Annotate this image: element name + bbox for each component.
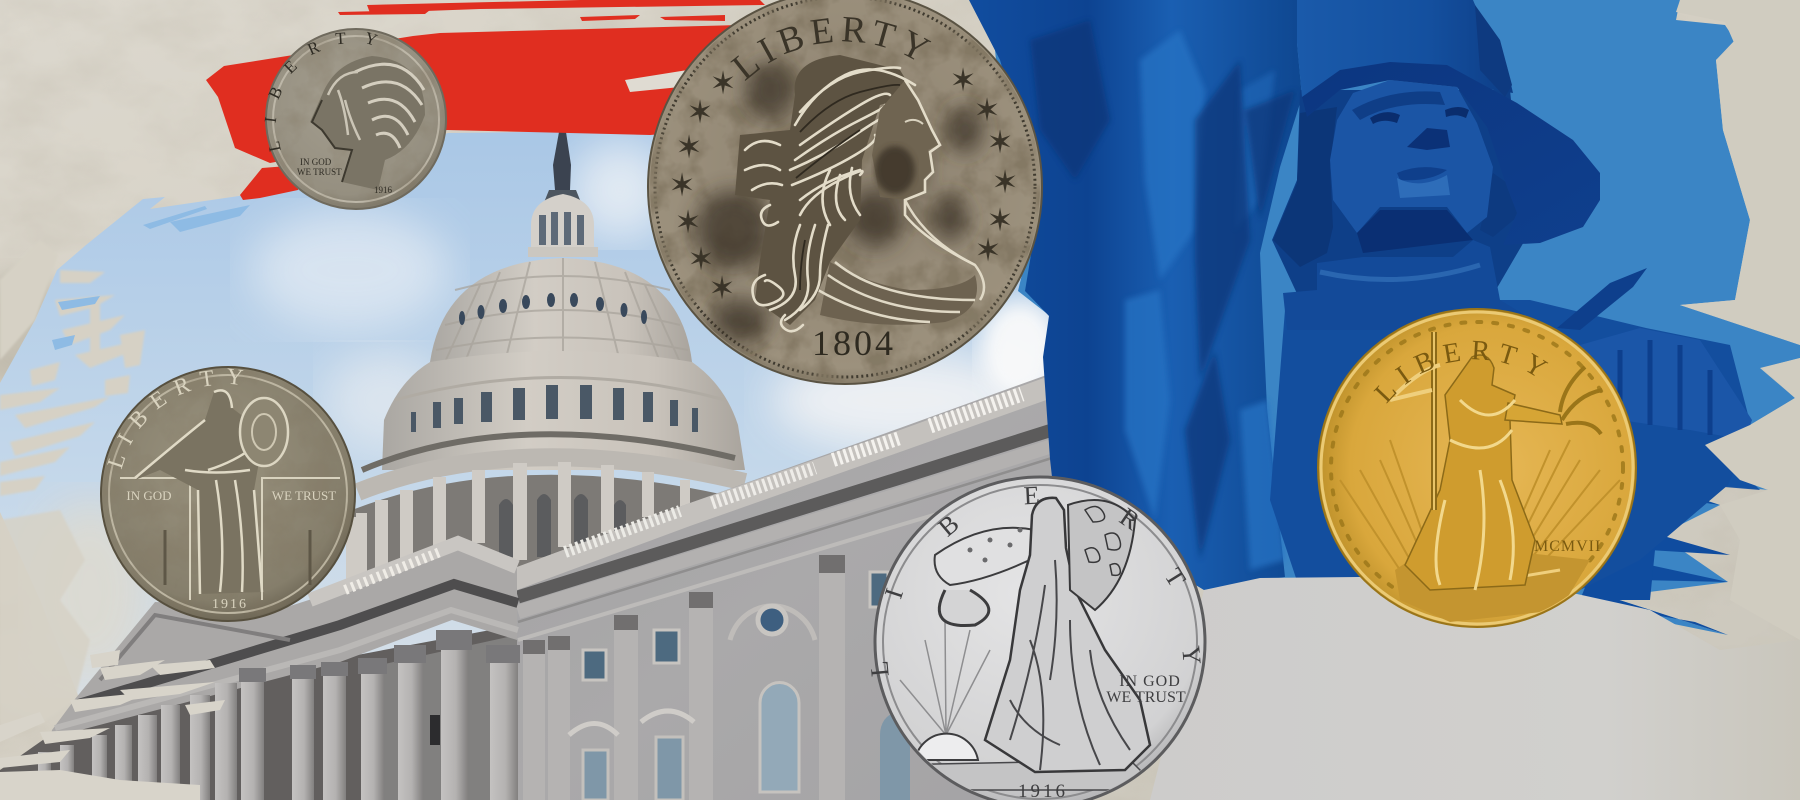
stars: ✶ bbox=[950, 62, 976, 98]
paper gap in red brush bbox=[625, 68, 700, 92]
stars: ✶ bbox=[688, 241, 714, 277]
lantern bbox=[528, 194, 598, 257]
coin: Mercury dime: LIBERTY bbox=[264, 32, 378, 152]
figure bbox=[1405, 355, 1535, 590]
coin letters: R bbox=[1114, 502, 1146, 536]
coin: walking Liberty half dollar bbox=[864, 477, 1207, 800]
hat bbox=[1297, 0, 1513, 97]
flag cape bbox=[935, 528, 1040, 585]
sky brush stroke bbox=[0, 125, 1060, 800]
stars: ✶ bbox=[669, 167, 695, 203]
capitol central portico bbox=[0, 543, 520, 800]
coin: standing Liberty quarter: WE TRUST bbox=[272, 488, 336, 503]
torch bbox=[1431, 332, 1437, 510]
stars: ✶ bbox=[975, 232, 1001, 268]
arched window bbox=[760, 682, 799, 792]
paper flecks over the sky, left edge bbox=[0, 240, 145, 725]
sword bbox=[1557, 268, 1647, 330]
cornice bbox=[518, 430, 1052, 597]
face bbox=[1330, 80, 1493, 233]
figure bbox=[985, 498, 1150, 772]
coin: standing Liberty quarter: IN GOD bbox=[126, 488, 172, 503]
columns bbox=[38, 640, 518, 800]
statue: Washington figure bbox=[1270, 0, 1752, 590]
capitol dome bbox=[345, 132, 746, 590]
wall bbox=[120, 478, 340, 600]
branches bbox=[1068, 500, 1135, 610]
dark streaks at right of brush bbox=[1580, 420, 1760, 600]
drum bbox=[382, 351, 745, 470]
coin: 1804 draped bust dollar: 1804 bbox=[812, 323, 896, 363]
collar bbox=[1283, 240, 1533, 330]
coin letters: E bbox=[1023, 481, 1040, 510]
bust drapery bbox=[820, 262, 977, 325]
capitol right wing bbox=[517, 373, 1052, 800]
coin: Mercury dime bbox=[264, 28, 447, 210]
statue: horse bbox=[969, 0, 1307, 590]
rays bbox=[1340, 440, 1620, 570]
coin letters: L bbox=[864, 660, 895, 678]
stars: ✶ bbox=[987, 202, 1013, 238]
coin: Mercury dime: 1916 bbox=[374, 185, 392, 195]
face bbox=[872, 80, 938, 200]
coin: walking Liberty half dollar: IN GOD bbox=[1119, 673, 1181, 690]
capitals bbox=[523, 555, 845, 654]
coin: Mercury dime: IN GOD bbox=[300, 157, 332, 167]
drape and branch bbox=[1390, 365, 1440, 400]
coin: standing Liberty quarter bbox=[100, 366, 356, 622]
rays and sun bbox=[900, 620, 990, 735]
head bbox=[310, 56, 425, 190]
stars bbox=[669, 62, 1018, 306]
coin: gold double eagle: LIBERTY bbox=[1374, 340, 1548, 404]
coin: standing Liberty quarter: 1916 bbox=[212, 597, 248, 612]
coin: 1804 draped bust dollar: LIBERTY bbox=[730, 16, 932, 81]
stars: ✶ bbox=[676, 129, 702, 165]
coin: walking Liberty half dollar: WE TRUST bbox=[1106, 689, 1186, 706]
coin: standing Liberty quarter: LIBERTY bbox=[107, 368, 244, 470]
stars: ✶ bbox=[675, 204, 701, 240]
hair bbox=[735, 55, 915, 325]
hair bbox=[1273, 107, 1337, 267]
blue fine strokes at brush top bbox=[52, 205, 250, 350]
cupola bbox=[430, 258, 692, 362]
liberty figure bbox=[135, 390, 262, 594]
body bbox=[1270, 300, 1752, 590]
paper flecks over the portico bbox=[0, 650, 225, 800]
coin letters: B bbox=[933, 509, 964, 542]
stars: ✶ bbox=[709, 270, 735, 306]
balustrade bbox=[517, 375, 1052, 590]
stars: ✶ bbox=[974, 92, 1000, 128]
epaulette bbox=[1580, 328, 1752, 440]
statue of freedom bbox=[543, 132, 582, 205]
stars: ✶ bbox=[992, 164, 1018, 200]
red brush stroke bbox=[206, 0, 765, 200]
coin: Mercury dime: WE TRUST bbox=[297, 167, 342, 177]
paper at right edge bbox=[1676, 0, 1800, 640]
coin: 1804 draped bust dollar bbox=[647, 0, 1043, 385]
stars: ✶ bbox=[710, 65, 736, 101]
bottom paper curve bbox=[1150, 577, 1800, 800]
coin letters: I bbox=[879, 585, 909, 602]
coin: gold double eagle: MCMVII bbox=[1534, 538, 1601, 555]
coin: gold double eagle bbox=[1317, 308, 1637, 628]
round window bbox=[758, 606, 786, 634]
stars: ✶ bbox=[687, 94, 713, 130]
stars: ✶ bbox=[987, 124, 1013, 160]
blue brush stroke bbox=[990, 0, 1800, 635]
coin letters: Y bbox=[1176, 645, 1207, 666]
pilasters bbox=[523, 565, 845, 800]
peristyle bbox=[345, 475, 746, 590]
head backing shadow bbox=[1272, 90, 1525, 300]
windows bbox=[583, 572, 888, 680]
dome windows bbox=[459, 293, 647, 325]
coin letters: T bbox=[1159, 563, 1192, 592]
toning blotches bbox=[695, 62, 983, 342]
ground bbox=[1395, 554, 1590, 622]
coin letters bbox=[864, 481, 1207, 678]
capitals bbox=[239, 630, 520, 682]
window pediments bbox=[569, 711, 694, 735]
